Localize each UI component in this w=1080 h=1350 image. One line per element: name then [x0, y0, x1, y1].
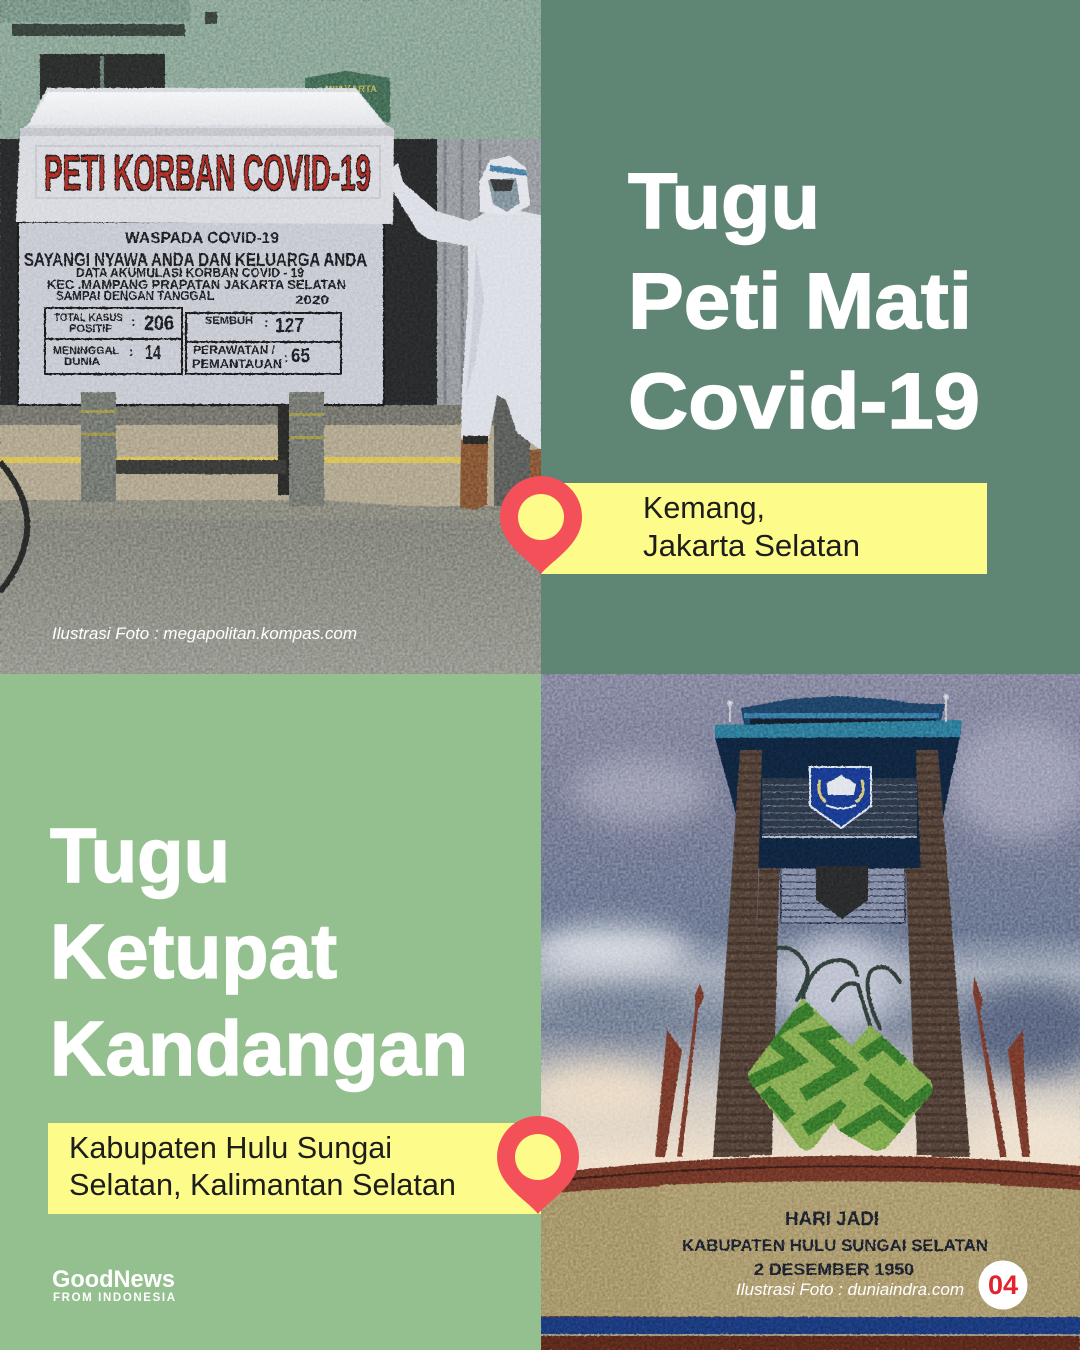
sign data table: 206 — [144, 312, 174, 335]
photo: Tugu Peti Mati coffin monument — [0, 0, 541, 674]
wall inscription: KABUPATEN HULU SUNGAI SELATAN — [682, 1236, 988, 1255]
bollards and rail — [81, 392, 324, 506]
sign body text — [24, 230, 367, 307]
panel: top-right green background — [541, 0, 1080, 674]
location label: Kabupaten Hulu Sungai Selatan: Selatan, Kalimantan Selatan — [69, 1167, 456, 1202]
location label: Kemang, Jakarta Selatan: Jakarta Selatan — [643, 528, 860, 563]
sign data table: TOTAL KASUS — [54, 312, 123, 324]
title: Tugu Ketupat Kandangan: Kandangan — [50, 1006, 468, 1092]
person in protective suit — [392, 156, 541, 510]
photo: Tugu Ketupat Kandangan tower — [530, 674, 1080, 1350]
wall: blue stripe — [541, 1317, 1080, 1334]
sign body text: DATA AKUMULASI KORBAN COVID - 19 — [76, 265, 304, 280]
sign: coffin board — [16, 88, 394, 405]
title: Tugu Ketupat Kandangan — [50, 813, 468, 1092]
location label: Kemang, Jakarta Selatan: Kemang, — [643, 490, 765, 525]
sign body text: KEC .MAMPANG PRAPATAN JAKARTA SELATAN — [47, 277, 346, 292]
title: Tugu Ketupat Kandangan: Tugu — [50, 813, 230, 899]
sign body text: SAMPAI DENGAN TANGGAL — [56, 288, 214, 303]
hanging dark pentagon — [816, 866, 868, 919]
sign data table: : — [264, 315, 268, 330]
lamps — [728, 695, 948, 722]
location label: Kabupaten Hulu Sungai Selatan: Kabupaten Hulu Sungai — [69, 1130, 392, 1165]
page number badge — [978, 1260, 1028, 1310]
ketupat leaves — [778, 948, 900, 1028]
sign data table: : — [129, 344, 133, 359]
sign data table: 127 — [275, 315, 304, 337]
title: Tugu Peti Mati Covid-19: Peti Mati — [628, 256, 972, 345]
page number badge: 04 — [988, 1270, 1018, 1300]
icon: location pin top — [500, 476, 582, 574]
sign data table: PEMANTAUAN — [192, 357, 282, 371]
sign data table: 14 — [145, 343, 161, 364]
icon: location pin bottom — [497, 1116, 579, 1214]
sign data table: DUNIA — [64, 356, 100, 368]
sign data table: MENINGGAL — [53, 345, 119, 357]
sign data table: : — [131, 314, 135, 329]
sign body text: 2020 — [295, 293, 329, 307]
wall: base brown cornice — [541, 1185, 1080, 1318]
location label: Kabupaten Hulu Sungai Selatan — [48, 1123, 541, 1214]
location label: Kemang, Jakarta Selatan — [541, 483, 987, 574]
caption: photo credit top: Ilustrasi Foto : megapolitan.kompas.com — [52, 624, 357, 643]
tower columns front — [713, 750, 970, 1157]
sign data table — [45, 308, 341, 374]
title: Tugu Peti Mati Covid-19 — [628, 156, 980, 445]
title: Tugu Peti Mati Covid-19: Tugu — [628, 156, 820, 245]
wall: beige plaque — [541, 1182, 1080, 1318]
tower columns back — [748, 850, 935, 1155]
crest shield — [810, 767, 871, 828]
ketupat left — [748, 998, 870, 1151]
caption: photo credit bottom: Ilustrasi Foto : duniaindra.com — [736, 1280, 964, 1299]
logo: GoodNews from Indonesia: GoodNews — [52, 1266, 175, 1293]
sign body text: SAYANGI NYAWA ANDA DAN KELUARGA ANDA — [24, 250, 367, 270]
sign data table: POSITIF — [69, 323, 112, 335]
title: Tugu Peti Mati Covid-19: Covid-19 — [628, 356, 980, 445]
sign body text: WASPADA COVID-19 — [125, 230, 279, 247]
spears — [655, 977, 1030, 1157]
lower louver — [781, 868, 905, 923]
wall inscription: 2 DESEMBER 1950 — [754, 1260, 914, 1279]
photo: Tugu Peti Mati coffin monument: NYAKARTA — [325, 84, 378, 94]
wall inscription: HARI JADI — [785, 1209, 879, 1230]
title: Tugu Ketupat Kandangan: Ketupat — [50, 909, 337, 995]
wall inscription — [682, 1209, 988, 1279]
ketupat right — [834, 1025, 933, 1151]
tower roof and beams — [715, 696, 962, 868]
sign data table: 65 — [291, 346, 310, 367]
sign data table: SEMBUH — [205, 315, 253, 327]
sign heading: PETI KORBAN COVID-19 — [44, 145, 371, 201]
sign data table: : — [284, 350, 288, 365]
sign data table: PERAWATAN / — [193, 343, 276, 357]
logo: GoodNews from Indonesia: FROM INDONESIA — [53, 1292, 175, 1304]
panel: bottom-left green background — [0, 674, 541, 1350]
